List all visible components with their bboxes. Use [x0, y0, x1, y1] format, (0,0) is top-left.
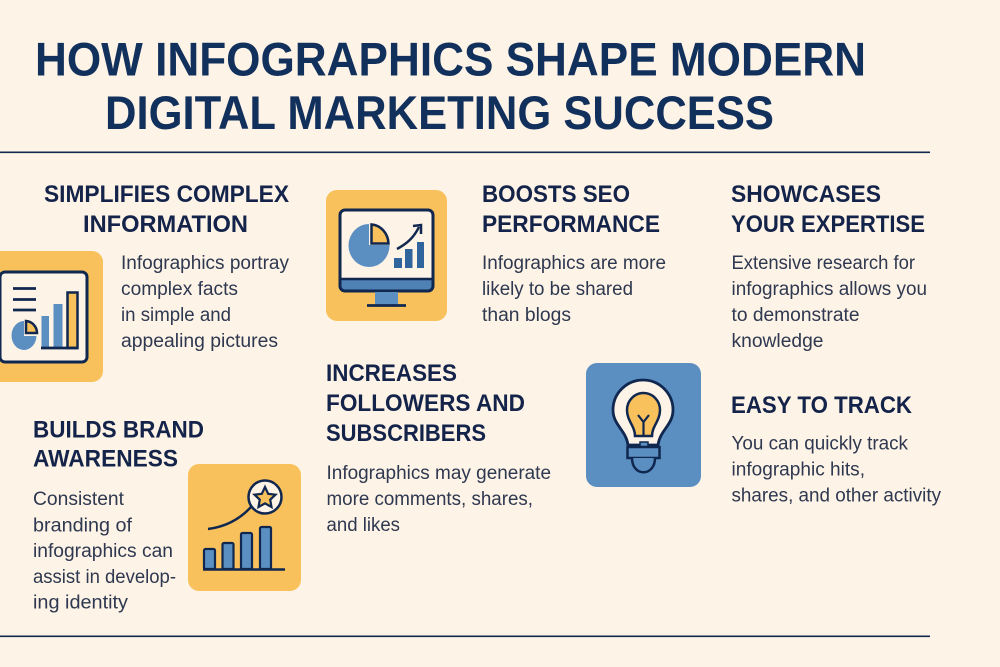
- panel: builds brand awareness: [33, 416, 301, 614]
- text block: Consistent: [33, 489, 125, 510]
- heading: track: EASY TO TRACK: [731, 392, 912, 419]
- text block: infographics can: [33, 541, 173, 562]
- heading: brand: AWARENESS: [33, 446, 178, 472]
- icon: monitor chart: [326, 190, 447, 321]
- text block: shares, and other activity: [732, 486, 941, 506]
- panel: boosts seo performance: [326, 181, 666, 326]
- text block: more comments, shares,: [326, 489, 533, 510]
- text block: Infographics are more: [482, 253, 666, 274]
- heading: seo: PERFORMANCE: [482, 211, 660, 238]
- title: DIGITAL MARKETING SUCCESS: [105, 86, 774, 139]
- text block: [33, 489, 176, 614]
- text block: to demonstrate: [732, 305, 860, 326]
- panel: easy to track: [586, 363, 941, 506]
- text block: appealing pictures: [121, 331, 278, 352]
- text block: [326, 463, 551, 536]
- text block: Infographics portray: [121, 253, 289, 274]
- text block: You can quickly track: [732, 434, 908, 454]
- heading: brand: BUILDS BRAND: [33, 416, 204, 444]
- text block: infographic hits,: [732, 460, 865, 480]
- heading: followers: [326, 360, 525, 447]
- text block: and likes: [326, 515, 400, 536]
- heading: expertise: YOUR EXPERTISE: [731, 211, 925, 238]
- icon: dashboard chart: [0, 251, 103, 382]
- icon: light bulb: [586, 363, 701, 487]
- heading: brand: [33, 416, 204, 472]
- text block: [732, 253, 927, 352]
- text block: complex facts: [121, 279, 238, 300]
- heading: simplifies: INFORMATION: [83, 211, 248, 238]
- text block: Infographics may generate: [326, 463, 551, 484]
- text block: knowledge: [732, 331, 824, 352]
- title: [35, 32, 866, 139]
- text block: assist in develop-: [33, 567, 176, 588]
- text block: [482, 253, 666, 326]
- text block: ing identity: [33, 592, 129, 614]
- heading: simplifies: [44, 181, 290, 238]
- panel: showcases your expertise: [731, 181, 927, 352]
- heading: expertise: SHOWCASES: [731, 181, 881, 208]
- heading: followers: INCREASES: [326, 360, 457, 387]
- text block: Extensive research for: [732, 253, 916, 274]
- heading: expertise: [731, 181, 925, 238]
- panel: increases followers and subscribers: [326, 360, 551, 536]
- panel: simplifies complex information: [0, 181, 290, 382]
- heading: seo: BOOSTS SEO: [482, 181, 630, 208]
- title: HOW INFOGRAPHICS SHAPE MODERN: [35, 32, 866, 86]
- heading: seo: [482, 181, 660, 238]
- heading: followers: SUBSCRIBERS: [326, 420, 486, 447]
- icon: growth chart with star: [188, 464, 301, 591]
- heading: simplifies: SIMPLIFIES COMPLEX: [44, 181, 290, 208]
- text block: infographics allows you: [732, 279, 927, 300]
- text block: [121, 253, 289, 352]
- text block: [732, 434, 941, 506]
- text block: than blogs: [482, 305, 571, 326]
- text block: in simple and: [121, 305, 231, 326]
- text block: likely to be shared: [482, 279, 633, 300]
- text block: branding of: [33, 516, 133, 536]
- heading: followers: FOLLOWERS AND: [326, 390, 525, 417]
